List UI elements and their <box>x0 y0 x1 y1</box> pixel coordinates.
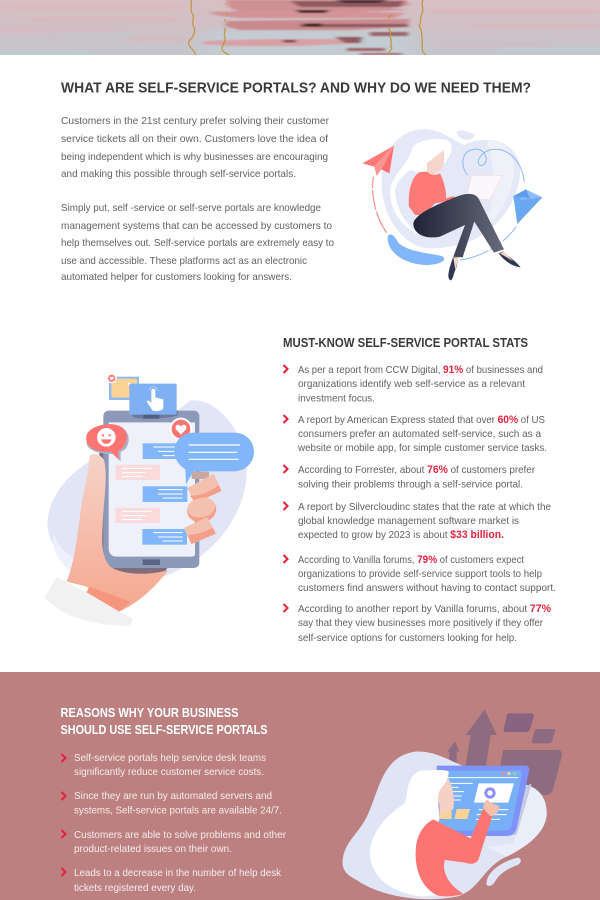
stats list <box>284 364 556 644</box>
stat 5: customers find answers without having to contact support. <box>298 583 556 594</box>
panel: reasons section background <box>0 672 600 900</box>
stat 5: organizations to provide self-service support tools to help <box>298 569 542 580</box>
text block: intro paragraphs: automated helper for customers looking for answers. <box>61 272 292 283</box>
banner image: water reflection <box>0 0 600 60</box>
stat 4 <box>284 502 551 541</box>
reasons list <box>62 753 287 894</box>
reason 1 <box>62 753 266 778</box>
stat 1 <box>284 364 543 404</box>
stat 6: say that they view businesses more positively if they offer <box>298 618 543 629</box>
icon: photo card with heart <box>107 373 139 400</box>
reason 2: systems, Self-service portals are available 24/7. <box>74 806 282 816</box>
text block: intro paragraphs: Customers in the 21st century prefer solving their customer <box>61 116 330 127</box>
icon: tap card <box>129 384 177 415</box>
stat 3: solving their problems through a self-service portal. <box>298 480 523 490</box>
stat 3 <box>284 464 535 490</box>
blob <box>343 752 547 899</box>
text block: intro paragraphs: service tickets all on their own. Customers love the idea of <box>61 134 328 145</box>
icon: blue paper plane <box>513 189 542 224</box>
reason 2 <box>62 791 282 816</box>
reason 3 <box>62 830 287 855</box>
heading: reasons why <box>60 705 268 737</box>
stat 6: According to another report by Vanilla forums, about 77% <box>298 603 551 615</box>
background arrows and tiles <box>447 709 562 795</box>
reason 1: Self-service portals help service desk teams <box>74 753 266 764</box>
text block: intro paragraphs: management systems that can be accessed by customers to <box>61 221 332 232</box>
reason 2: Since they are run by automated servers and <box>74 791 272 802</box>
heading: reasons why: SHOULD USE SELF-SERVICE PORTALS <box>60 722 268 737</box>
stat 1: investment focus. <box>298 394 375 404</box>
icon: heart badge <box>170 418 192 440</box>
illustration: hand holding phone with chat bubbles <box>45 373 254 626</box>
text block: intro paragraphs: Simply put, self -service or self-serve portals are knowledge <box>61 203 321 214</box>
reason 3: product-related issues on their own. <box>74 844 232 855</box>
text block: intro paragraphs: help themselves out. Self-service portals are extremely easy to <box>61 238 334 249</box>
reason 3: Customers are able to solve problems and other <box>74 830 287 841</box>
stat 6: self-service options for customers looking for help. <box>298 633 517 644</box>
hand <box>45 454 221 626</box>
stat 5: According to Vanilla forums, 79% of customers expect <box>298 554 524 566</box>
chat bubble: smile <box>86 424 129 461</box>
stat 6 <box>284 603 551 644</box>
text block: intro paragraphs: being independent which is why businesses are encouraging <box>61 152 328 163</box>
heading: must-know stats: MUST-KNOW SELF-SERVICE PORTAL STATS <box>283 335 528 350</box>
woman figure <box>370 770 499 897</box>
icon: red paper plane <box>362 146 394 176</box>
reason 1: significantly reduce customer service costs. <box>74 767 264 778</box>
stat 2: A report by American Express stated that over 60% of US <box>298 414 545 426</box>
heading: what are self-service portals: WHAT ARE SELF-SERVICE PORTALS? AND WHY DO WE NEED THEM? <box>61 80 531 96</box>
heading: reasons why: REASONS WHY YOUR BUSINESS <box>60 705 239 720</box>
stat 4: global knowledge management software market is <box>298 516 519 527</box>
phone <box>99 411 199 575</box>
text block: intro paragraphs: use and accessible. These platforms act as an electronic <box>61 256 307 267</box>
stat 1: organizations identify web self-service as a relevant <box>298 379 525 390</box>
reason 4: tickets registered every day. <box>74 883 196 894</box>
stat 4: A report by Silvercloudinc states that the rate at which the <box>298 502 551 513</box>
stat 2: consumers prefer an automated self-service, such as a <box>298 429 541 440</box>
browser window <box>437 766 529 836</box>
illustration: woman with laptop and paper planes <box>362 129 542 280</box>
reason 4: Leads to a decrease in the number of help desk <box>74 868 282 879</box>
stat 4: expected to grow by 2023 is about $33 billion. <box>298 529 504 541</box>
reason 4 <box>62 868 282 894</box>
stat 2 <box>284 414 547 454</box>
woman figure <box>409 150 521 280</box>
illustration: woman using browser screen <box>343 709 562 899</box>
text block: intro paragraphs: and making this possible through self-service portals. <box>61 169 296 180</box>
text block: intro paragraphs <box>61 116 334 283</box>
stat 1: As per a report from CCW Digital, 91% of businesses and <box>298 364 543 376</box>
chat bubble: blue <box>174 433 254 485</box>
stat 5 <box>284 554 556 594</box>
stat 3: According to Forrester, about 76% of customers prefer <box>298 464 535 476</box>
stat 2: website or mobile app, for simple customer service tasks. <box>297 443 547 454</box>
